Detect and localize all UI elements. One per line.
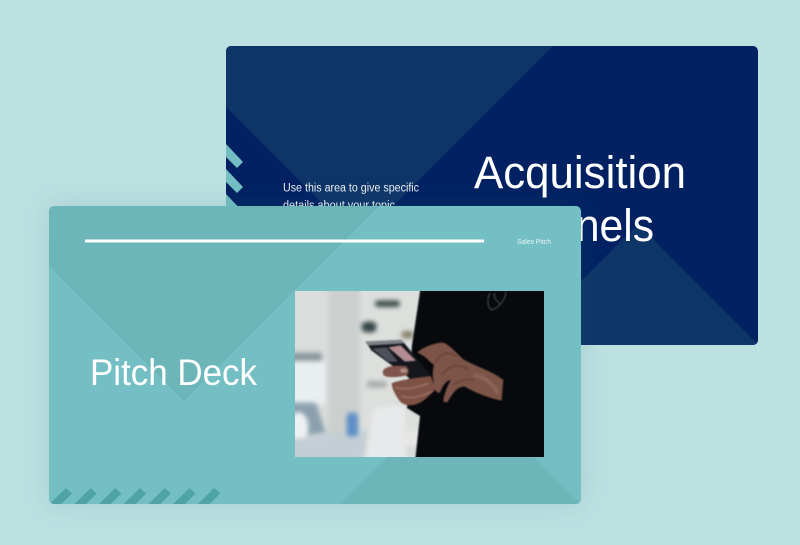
heading: Acquisition Channels: Acquisition — [474, 147, 686, 198]
infographic canvas — [44, 46, 758, 509]
navy slide base — [226, 46, 758, 345]
near hand — [417, 343, 503, 402]
white header rule — [85, 240, 484, 242]
icon: stripes along bottom edge — [50, 488, 220, 504]
far hand fingers — [392, 376, 436, 405]
text block: slide description: Use this area to give specific — [283, 182, 419, 194]
panel: navy slide Acquisition Channels — [226, 46, 762, 348]
phone — [366, 340, 431, 379]
navy slide geometric shapes — [226, 46, 762, 348]
blurred office background — [295, 291, 418, 457]
necklace detail — [488, 292, 506, 310]
teal slide base — [49, 206, 581, 504]
icon: teal chevron stripes — [226, 144, 243, 206]
text block: slide description: details about your topic. — [283, 200, 398, 212]
heading: Acquisition Channels: Channels — [474, 200, 654, 251]
hands and phone — [366, 340, 503, 405]
thumb — [383, 366, 409, 377]
heading: Pitch Deck: Pitch Deck — [90, 352, 257, 393]
panel: teal slide Pitch Deck — [49, 206, 585, 508]
dark clothing — [407, 285, 550, 462]
teal slide geometric shapes — [49, 206, 585, 508]
photo: person using smartphone — [295, 291, 544, 457]
label: Sales Pitch: Sales Pitch — [517, 237, 551, 246]
